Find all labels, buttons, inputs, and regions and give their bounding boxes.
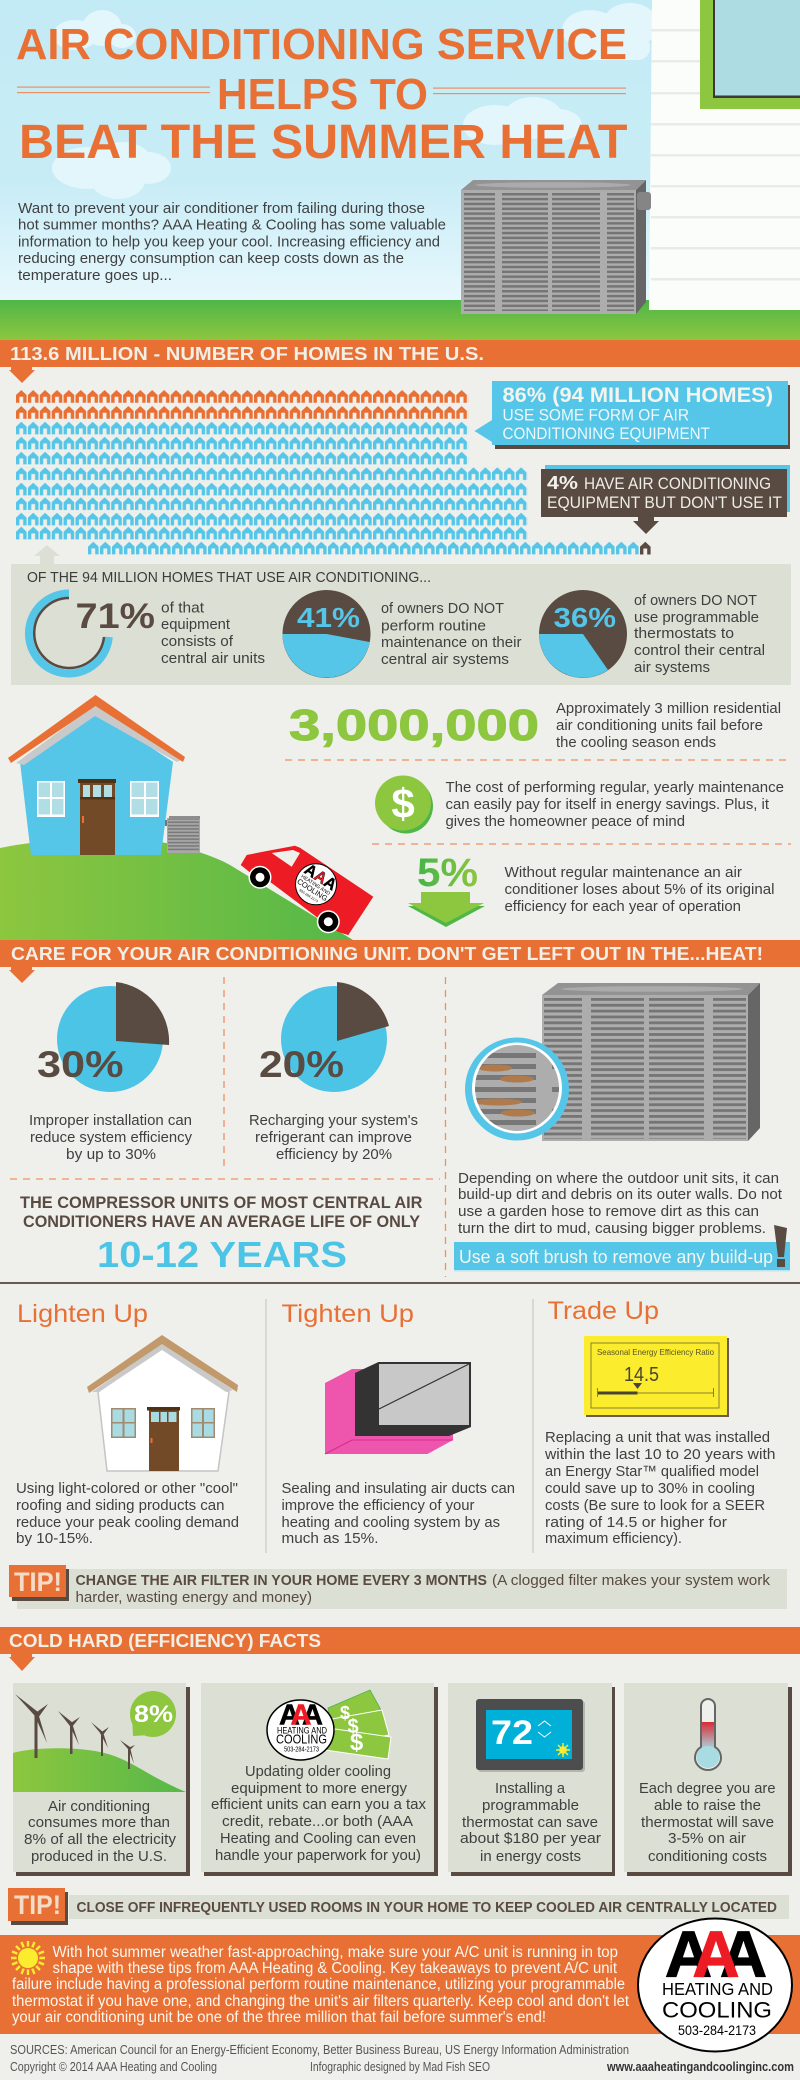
house grid chart: 113.6 million homes [16,390,651,555]
text: improve the efficiency of your [282,1497,474,1514]
text: about $180 per year [460,1830,601,1847]
icon: SEER label: Seasonal Energy Efficiency Ratio [597,1347,714,1357]
tip: change the air filter: TIP! [14,1567,62,1597]
text: outdoor unit dirt [458,1170,783,1237]
heading: Tighten Up [282,1300,414,1328]
text: outdoor unit dirt: turn the dirt to mud, causing bigger problems. [458,1220,766,1237]
text: by 10-15%. [16,1530,93,1547]
stat: 5 percent with down arrow: 5% [417,851,478,895]
logo: AAA small [267,1700,334,1760]
stat: 3,000,000: 3,000,000 [289,701,539,750]
card: tax credit [201,1683,438,1876]
logo: AAA Heating and Cooling: A [692,1918,739,1990]
text: outdoor unit dirt: build-up dirt and debris on its outer walls. Do not [458,1186,783,1203]
tip: change the air filter: harder, wasting energy and money) [76,1590,312,1606]
callout: 86 percent [474,381,790,449]
text: failure include having a professional perform routine maintenance, utilizing your programmable [12,1976,625,1993]
heading bar: care for your unit: CARE FOR YOUR AIR CONDITIONING UNIT. DON'T GET LEFT OUT IN THE...HEAT! [11,943,763,964]
icon: red service van: 503-284-2173 [298,888,319,903]
callout: 4 percent: HAVE AIR CONDITIONING [584,474,771,493]
callout: 4 percent: 4% [547,473,578,493]
text: 71 percent: of that [161,600,205,616]
text: improper installation: reduce system efficiency [30,1129,192,1146]
chart: 71 percent ring: 71% [76,597,155,636]
intro text: temperature goes up... [18,267,172,284]
tip: change the air filter [9,1565,787,1609]
icon: small AC unit [165,816,200,853]
text: costs (Be sure to look for a SEER [545,1497,765,1514]
column: trade up [544,1297,776,1547]
text: 36 percent: use programmable [634,609,759,626]
panel: 94 million homes [11,545,791,685]
chart: 71 percent ring [29,593,155,673]
text: With hot summer weather fast-approaching, make sure your A/C unit is running in top [52,1944,618,1961]
text: outdoor unit dirt: Depending on where the outdoor unit sits, it can [458,1170,779,1187]
text: Air conditioning [48,1798,150,1815]
text: 5 percent: conditioner loses about 5% of its original [504,881,774,898]
text: reduce your peak cooling demand [16,1514,239,1531]
tip: close off rooms: TIP! [14,1890,61,1920]
callout: 4 percent: EQUIPMENT BUT DON'T USE IT [547,493,782,512]
heading bar: efficiency facts: COLD HARD (EFFICIENCY) FACTS [9,1630,321,1651]
icon: blue house [8,695,185,855]
text: 41 percent [381,600,522,668]
footer: sources and credits [10,2043,794,2074]
chart: 20 percent pie: 20% [259,1044,344,1085]
callout: soft brush: Use a soft brush to remove any build-up [459,1247,773,1267]
text: could save up to 30% in cooling [545,1480,755,1497]
text: 5 percent: Without regular maintenance an air [504,864,742,881]
logo: AAA small: A [290,1700,312,1732]
logo: AAA Heating and Cooling: HEATING AND [662,1979,773,1999]
text: maximum efficiency). [545,1530,682,1547]
text: 41 percent: maintenance on their [381,634,522,651]
text: 8% of all the electricity [24,1831,177,1848]
icon: red service van: AAA [301,861,340,895]
icon: SEER label: 14.5 [624,1364,659,1386]
icon: red service van: COOLING [295,877,329,903]
house siding and window [649,0,800,310]
text: much as 15%. [282,1530,378,1547]
text: 41 percent: of owners DO NOT [381,600,504,617]
text: Installing a [495,1780,566,1797]
text: heating and cooling system by as [282,1514,500,1531]
icon: hill with wind turbines [13,1694,186,1792]
text [282,1480,515,1547]
text: Sealing and insulating air ducts can [282,1480,515,1497]
text: thermostat if you have one, and changing the unit's air filters quarterly. Keep cool and don't let [12,1993,630,2010]
text: 41 percent: central air systems [381,651,509,668]
chart: 30 percent pie: 30% [37,1044,124,1085]
text: 36 percent: control their central [634,642,765,659]
text [12,1944,630,2026]
card: thermostat [448,1683,615,1876]
text: 71 percent: equipment [161,616,231,633]
text [544,1429,776,1547]
divider [0,1282,800,1284]
text: yearly maintenance [446,779,784,830]
text: produced in the U.S. [31,1848,167,1865]
stat: 5 percent with down arrow [408,851,485,927]
column: tighten up [282,1300,515,1547]
text: Replacing a unit that was installed [545,1429,770,1446]
chart: 41 percent pie: 41% [297,602,360,633]
text: handle your paperwork for you) [215,1847,421,1864]
icon: money bills: $ [340,1703,350,1723]
icon: magnified dirty coil [465,1038,569,1140]
text: Using light-colored or other "cool" [16,1480,238,1497]
text: yearly maintenance: gives the homeowner peace of mind [446,813,685,830]
stat: 3,000,000: Approximately 3 million residential [556,700,781,717]
footer: sources and credits: SOURCES: American Council for an Energy-Efficient Economy, Better Business Bureau, US Energy Information Administration [10,2043,629,2057]
title: HELPS TO [217,70,428,119]
logo: AAA small: A [302,1700,323,1732]
intro text [18,200,446,284]
text: recharging refrigerant: efficiency by 20% [276,1146,392,1163]
text: improper installation [29,1112,192,1163]
logo: AAA Heating and Cooling: COOLING [662,1998,772,2022]
text: Heating and Cooling can even [220,1830,416,1847]
chart: 30 percent pie [37,982,169,1092]
text: 36 percent [634,592,765,676]
column: lighten up [16,1300,239,1547]
text: 5 percent: efficiency for each year of operation [504,898,741,915]
text: yearly maintenance: can easily pay for itself in energy savings. Plus, it [446,796,770,813]
text: thermostat can save [462,1814,598,1831]
panel heading: OF THE 94 MILLION HOMES THAT USE AIR CONDITIONING... [27,570,431,586]
text: compressor life: CONDITIONERS HAVE AN AVERAGE LIFE OF ONLY [23,1212,421,1231]
text: compressor life [20,1193,422,1275]
callout: 86 percent: USE SOME FORM OF AIR [502,406,689,424]
heading bar: efficiency facts [0,1627,800,1671]
logo: AAA Heating and Cooling: A [665,1918,712,1990]
stat: 10-12 years: 10-12 YEARS [97,1234,347,1275]
text: improper installation: by up to 30% [66,1146,156,1163]
icon: dollar coin [375,776,433,834]
callout: 86 percent: 86% (94 MILLION HOMES) [502,383,773,407]
heading bar: number of homes [0,340,800,383]
text: 71 percent: consists of [161,633,234,650]
callout: soft brush [454,1225,790,1272]
text [639,1780,776,1865]
icon: money bills [325,1690,391,1759]
text: 36 percent: thermostats to [634,625,734,642]
footer: sources and credits: Copyright © 2014 AAA Heating and Cooling [10,2060,217,2074]
text [16,1480,239,1547]
icon: money bills: $ [347,1716,359,1738]
tip: close off rooms: CLOSE OFF INFREQUENTLY USED ROOMS IN YOUR HOME TO KEEP COOLED AIR CENTRALLY LOCATED [76,1900,777,1916]
text: 71 percent [161,600,265,667]
heading: Trade Up [548,1297,659,1325]
icon: dollar coin: $ [391,780,415,827]
text: shape with these tips from AAA Heating & Cooling. Key takeaways to prevent A/C unit [52,1960,618,1977]
panel: closing summary [0,1935,800,2034]
intro text: reducing energy consumption can keep costs down as the [18,250,404,267]
text: outdoor unit dirt: use a garden hose to remove dirt as this can [458,1203,759,1220]
text: recharging refrigerant: refrigerant can improve [255,1129,412,1146]
text: roofing and siding products can [16,1497,225,1514]
icon: programmable thermostat: 72 [491,1714,533,1752]
callout: 4 percent [541,465,790,534]
text: improper installation: Improper installation can [29,1112,192,1129]
logo: AAA Heating and Cooling: A [720,1918,767,1990]
heading bar: number of homes: 113.6 MILLION - NUMBER OF HOMES IN THE U.S. [10,343,484,364]
icon: red service van: HEATING AND [300,874,331,897]
tip: close off rooms [8,1888,789,1925]
icon: 8 percent bubble: 8% [134,1701,173,1728]
icon: thermometer [695,1699,721,1770]
heading bar: care for your unit [0,940,800,983]
text: able to raise the [654,1797,761,1814]
card: raise the thermostat [624,1683,792,1876]
icon: programmable thermostat [476,1699,585,1772]
text: Updating older cooling [245,1763,391,1780]
text: in energy costs [480,1848,581,1865]
intro text: information to help you keep your cool. Increasing efficiency and [18,234,440,250]
icon: 8 percent bubble [130,1691,176,1737]
chart: 36 percent pie: 36% [554,602,616,633]
icon: outdoor AC unit [461,180,651,314]
text: 3-5% on air [668,1830,746,1847]
panel: sky header [0,0,800,340]
text: recharging refrigerant: Recharging your system's [249,1112,418,1129]
text: consumes more than [28,1814,170,1831]
hill [0,838,353,940]
text: 5 percent [504,864,774,915]
text: recharging refrigerant [249,1112,418,1163]
title: AIR CONDITIONING SERVICE [16,20,627,69]
text: 36 percent: of owners DO NOT [634,592,757,609]
text [460,1780,601,1865]
text: equipment to more energy [231,1780,407,1797]
text: Each degree you are [639,1780,776,1797]
logo: AAA Heating and Cooling [638,1918,792,2052]
text [24,1798,177,1865]
logo: AAA small: COOLING [276,1732,327,1746]
title: BEAT THE SUMMER HEAT [19,116,628,169]
stat: 3,000,000 [289,700,781,751]
text: programmable [482,1797,579,1814]
stat: 3,000,000: the cooling season ends [556,734,716,751]
chart: 20 percent pie [259,982,389,1092]
text: rating of 14.5 or higher for [545,1514,727,1531]
title [16,20,628,169]
text: 71 percent: central air units [161,650,265,667]
icon: money bills: $ [350,1729,364,1756]
chart: 36 percent pie [539,590,627,678]
text [211,1763,426,1864]
icon: red service van [241,846,373,935]
text: credit, rebate...or both (AAA [222,1813,413,1830]
tip: change the air filter: (A clogged filter makes your system work [492,1573,771,1589]
text: within the last 10 to 20 years with [544,1446,776,1463]
stat: 3,000,000: air conditioning units fail before [556,717,763,734]
icon: white house [87,1335,238,1471]
text: 36 percent: air systems [634,659,710,676]
heading: Lighten Up [17,1300,148,1328]
logo: AAA small: HEATING AND [277,1726,327,1736]
card: electricity [13,1683,190,1876]
text: thermostat will save [641,1814,774,1831]
icon: sun [11,1941,45,1975]
icon: insulated air duct [325,1362,471,1454]
text: an Energy Star™ qualified model [545,1463,759,1480]
icon: exclamation mark [774,1225,787,1267]
intro text: Want to prevent your air conditioner from failing during those [18,200,425,217]
logo: AAA small: A [279,1700,300,1732]
intro text: hot summer months? AAA Heating & Cooling has some valuable [18,216,446,234]
text: compressor life: THE COMPRESSOR UNITS OF MOST CENTRAL AIR [20,1193,422,1212]
logo: AAA small: 503-284-2173 [284,1746,319,1754]
clouds [52,3,658,199]
chart: 41 percent pie [282,590,370,678]
logo: AAA Heating and Cooling: 503-284-2173 [678,2022,756,2038]
text: your air conditioning unit be one of the three million that fail before summer's end! [12,2009,546,2026]
text: conditioning costs [648,1848,767,1865]
footer: sources and credits: Infographic designed by Mad Fish SEO [310,2060,490,2074]
icon: large AC unit [542,983,760,1141]
text: efficient units can earn you a tax [211,1796,426,1813]
tip: change the air filter: CHANGE THE AIR FILTER IN YOUR HOME EVERY 3 MONTHS [76,1573,487,1589]
icon: SEER label [584,1336,729,1417]
text: yearly maintenance: The cost of performing regular, yearly maintenance [446,779,784,796]
callout: 86 percent: CONDITIONING EQUIPMENT [502,424,710,443]
text: 41 percent: perform routine [381,618,486,634]
